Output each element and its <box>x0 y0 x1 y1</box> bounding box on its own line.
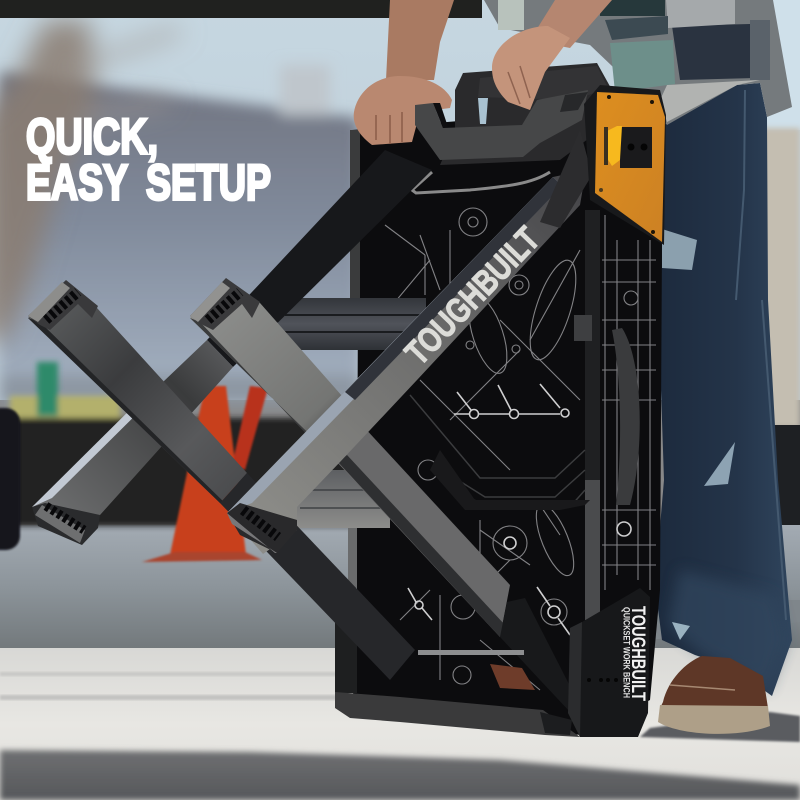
traffic cones <box>142 386 268 562</box>
dark wall base on right <box>768 425 800 550</box>
folding wire bracket <box>412 172 550 193</box>
bright sky at upper right <box>760 0 800 130</box>
top dark beam <box>0 0 482 18</box>
foot cap <box>32 503 100 545</box>
foot cap <box>190 278 260 330</box>
bright rosette rings <box>408 384 631 635</box>
foot cap <box>28 280 98 330</box>
pavement <box>0 600 800 800</box>
bench tabletop: black panel <box>335 110 662 735</box>
title <box>26 109 271 211</box>
front beam with TOUGHBUILT logo <box>227 130 592 554</box>
orange end cap with clamp <box>584 85 666 245</box>
logo text: TOUGHBUILT <box>398 220 547 373</box>
hedge and yellow plants <box>10 362 355 526</box>
title: SETUP <box>146 155 271 211</box>
front carry handle <box>415 90 588 160</box>
person: plaid shirt <box>484 0 792 125</box>
building behind the bench <box>0 65 360 405</box>
title: QUICK, <box>26 109 158 165</box>
stepped chevron ribs in centre <box>410 395 585 507</box>
back left leg upper dark section <box>207 150 432 367</box>
person: boot <box>658 656 770 734</box>
beige wall on right <box>760 128 800 428</box>
person: left arm and hand <box>354 0 454 145</box>
bracket foot <box>500 598 572 712</box>
leg continuation to lower right <box>220 473 415 680</box>
product name: QUICKSET WORK BENCH <box>622 607 632 698</box>
molded rib pattern <box>380 208 656 690</box>
bare tree <box>0 20 180 340</box>
title: EASY <box>26 155 128 211</box>
crossbar slats between the legs <box>278 298 426 528</box>
folding side handle <box>612 328 640 505</box>
clamp block <box>620 127 652 168</box>
foot cap <box>227 503 297 553</box>
front left leg, crossing over <box>28 280 415 680</box>
bottom wire rod and boot reflection <box>418 650 535 690</box>
brand text: TOUGHBUILT <box>627 606 648 701</box>
person: jeans <box>655 83 792 696</box>
right leg of second X pair <box>190 278 572 712</box>
tire <box>0 408 20 550</box>
bottom frame rail <box>335 692 580 737</box>
black side panel with product text <box>568 588 650 737</box>
yellow latch <box>605 126 622 166</box>
person: right arm and hand <box>492 0 612 110</box>
small holes <box>587 678 618 682</box>
back left leg lower section <box>32 340 233 545</box>
road <box>0 525 800 650</box>
rear handle <box>440 63 612 165</box>
